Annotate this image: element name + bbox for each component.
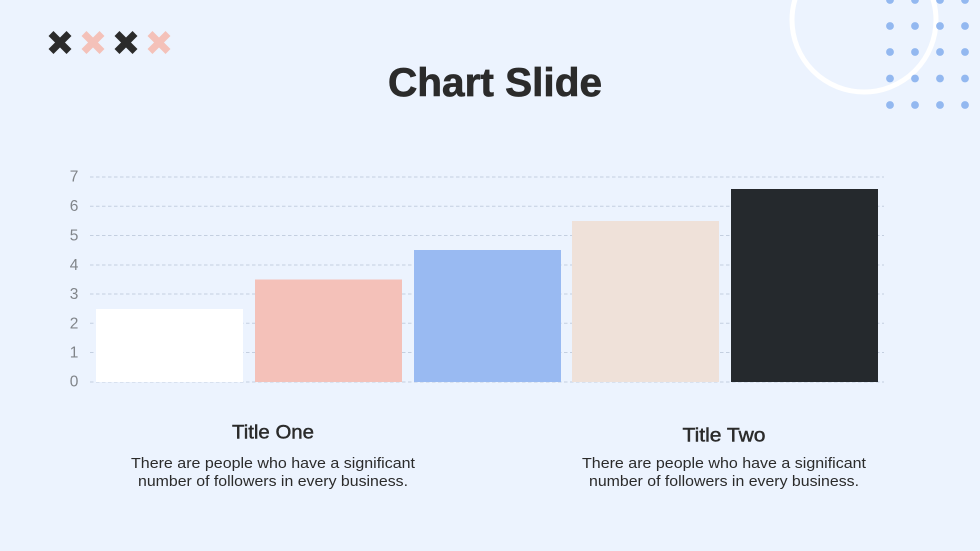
y axis labels: 4 <box>70 257 79 274</box>
text block: title one: There are people who have a significant <box>131 455 416 472</box>
bar: dark <box>731 189 878 382</box>
title: Chart Slide <box>388 61 602 105</box>
bar: pink <box>255 280 402 382</box>
y axis labels <box>70 168 79 390</box>
y axis labels: 3 <box>70 286 78 303</box>
y axis labels: 2 <box>70 316 78 332</box>
text block: title two: There are people who have a significant <box>582 455 867 472</box>
text block: title one: Title One <box>232 422 314 444</box>
text block: title two <box>582 426 867 490</box>
y axis labels: 1 <box>70 344 78 362</box>
y axis labels: 6 <box>70 198 78 215</box>
y axis labels: 5 <box>70 228 78 244</box>
decorative white ring <box>792 0 936 92</box>
bar chart <box>70 168 884 390</box>
icon: row of four crosses <box>51 34 168 52</box>
text block: title one <box>131 422 416 490</box>
y axis labels: 7 <box>70 168 78 186</box>
text block: title two: Title Two <box>682 426 766 446</box>
y axis labels: 0 <box>70 374 79 390</box>
text block: title one: number of followers in every business. <box>138 473 408 490</box>
bar: beige <box>572 221 719 382</box>
bar: white <box>96 309 243 382</box>
decorative dot grid <box>886 0 969 109</box>
text block: title two: number of followers in every business. <box>589 473 859 490</box>
bar: blue <box>414 250 561 382</box>
